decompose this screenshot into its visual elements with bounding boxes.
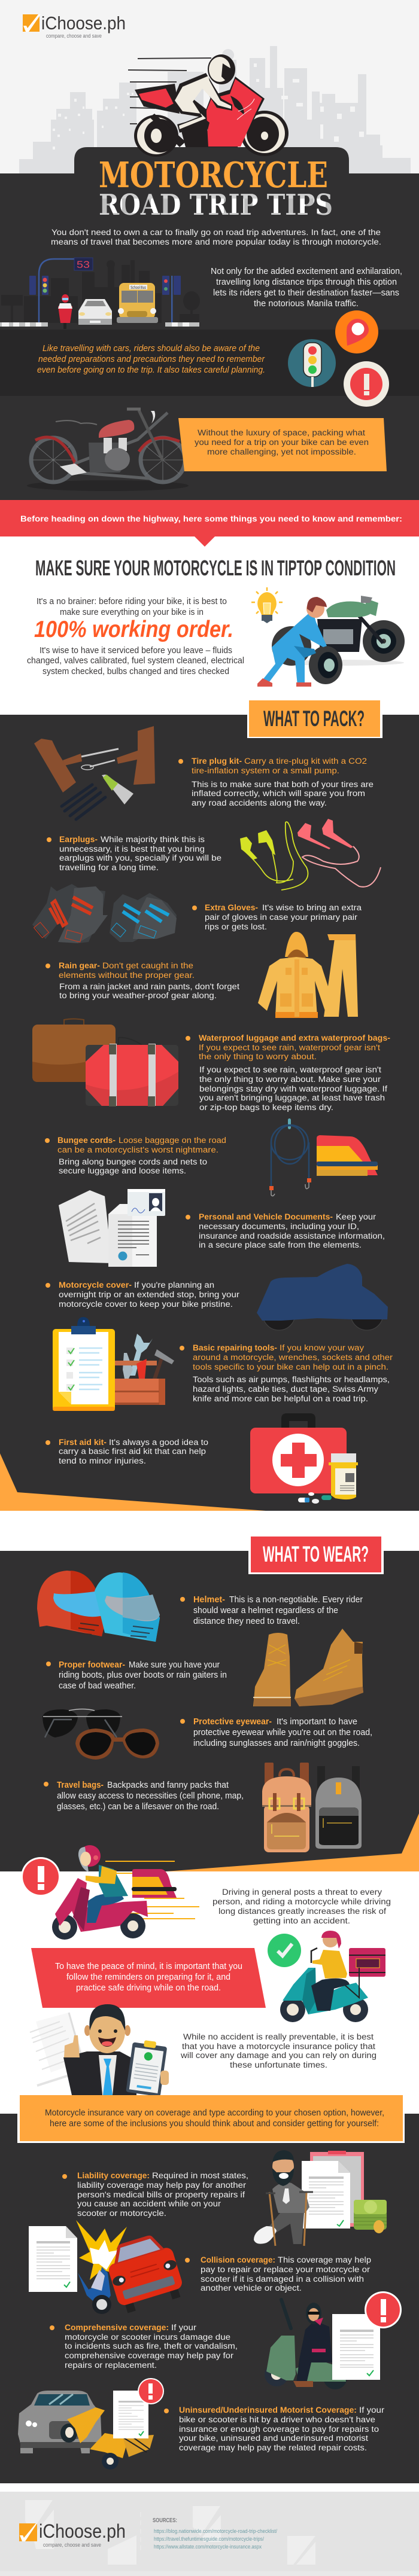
item: motorcycle cover: motorcycle cover to keep your bike pristine. bbox=[59, 1300, 233, 1309]
body text: insurance policy: will cover any damage and you can rely on during bbox=[180, 2051, 377, 2060]
orange note: Without the luxury of space, packing what bbox=[198, 428, 365, 437]
item: uninsured motorist coverage: Uninsured/Underinsured Motorist Coverage: bbox=[179, 2406, 357, 2415]
item: motorcycle cover: Motorcycle cover- bbox=[59, 1281, 132, 1289]
logo: iChoose.ph header: compare, choose and save bbox=[46, 33, 102, 39]
red callout: practice safe driving while on the road. bbox=[76, 1983, 221, 1993]
item: first aid kit: It's always a good idea to bbox=[109, 1438, 208, 1447]
logo: iChoose.ph footer bbox=[19, 2520, 126, 2548]
title: MOTORCYCLE bbox=[99, 154, 328, 196]
icon: alert bbox=[21, 1857, 60, 1897]
item: bungee cords bbox=[45, 1136, 226, 1175]
icon: backpacks bbox=[262, 1763, 362, 1852]
item: helmet: should wear a helmet regardless of the bbox=[193, 1605, 338, 1615]
item: tire plug kit: tire-inflation system or a small pump. bbox=[192, 766, 339, 775]
item: basic repairing tools: Basic repairing tools- bbox=[193, 1343, 277, 1352]
item: motorcycle cover: If you're planning an bbox=[134, 1281, 214, 1289]
logo: iChoose.ph header bbox=[23, 13, 126, 39]
mechanic illustration bbox=[251, 587, 405, 687]
item: waterproof luggage: If you expect to see rain, waterproof gear isn't bbox=[199, 1065, 381, 1074]
item: documents: Personal and Vehicle Documents- bbox=[199, 1212, 333, 1221]
item: liability coverage: scooter or motorcycle. bbox=[77, 2209, 166, 2218]
speed lines bbox=[128, 58, 211, 124]
logo: iChoose.ph footer: compare, choose and save bbox=[43, 2542, 101, 2548]
item: travel bags: Travel bags- bbox=[57, 1780, 104, 1790]
item: rain gear bbox=[45, 961, 239, 1000]
illustration: thief on scooter with document bbox=[265, 2291, 402, 2389]
item: collision coverage: pay to repair or replace your motorcycle or bbox=[201, 2265, 371, 2274]
city skyline bbox=[19, 46, 411, 173]
orange note bbox=[178, 418, 387, 471]
illustration: safe scooter rider bbox=[280, 1931, 385, 2022]
item: liability coverage: person's medical bills or property repairs if bbox=[77, 2190, 245, 2199]
item: collision coverage: another vehicle or object. bbox=[201, 2284, 302, 2293]
item: tire plug kit bbox=[178, 757, 374, 807]
item: extra gloves: pair of gloves in case your primary pair bbox=[205, 913, 358, 922]
orange insurance banner: here are some of the inclusions you should think about and consider getting for yourself: bbox=[50, 2118, 379, 2129]
item: waterproof luggage: Waterproof luggage and extra waterproof bags- bbox=[199, 1034, 390, 1042]
tiptop text block bbox=[27, 596, 244, 676]
orange note: more challenging, yet not impossible. bbox=[207, 447, 356, 456]
item: proper footwear: riding boots, plus over boots or rain gaiters in bbox=[59, 1670, 227, 1680]
title tab bbox=[74, 147, 349, 174]
item: liability coverage: Liability coverage: bbox=[77, 2171, 150, 2180]
icon: boots bbox=[253, 1629, 363, 1706]
sources list: https://blog.nationwide.com/motorcycle-road-trip-checklist/ bbox=[154, 2528, 277, 2535]
item: protective eyewear bbox=[180, 1717, 372, 1748]
orange note: you need for a trip on your bike can be even bbox=[195, 438, 369, 447]
item: collision coverage bbox=[185, 2255, 371, 2293]
item: collision coverage: Collision coverage: bbox=[201, 2255, 275, 2264]
body text: driving threat bbox=[212, 1888, 391, 1925]
tiptop text block: system checked, bulbs changed and tires checked bbox=[42, 666, 229, 676]
intro text: You don't need to own a car to finally go on road trip adventures. In fact, one of the bbox=[51, 228, 381, 237]
item: rain gear: to bring your weather-proof gear along. bbox=[59, 991, 217, 1000]
item: documents: Keep your bbox=[336, 1212, 377, 1221]
body text: driving threat: long distances greatly increases the risk of bbox=[218, 1907, 386, 1916]
item: tire plug kit: Carry a tire-plug kit with a CO2 bbox=[244, 757, 367, 766]
item: earplugs bbox=[47, 835, 221, 872]
logo: iChoose.ph footer: iChoose.ph bbox=[39, 2520, 126, 2542]
item: extra gloves: rips or gets lost. bbox=[205, 922, 267, 931]
icon: rain gear bbox=[258, 932, 358, 1018]
illustration: speeding scooter rider bbox=[52, 1845, 199, 1940]
illustration: car hitting yellow scooter bbox=[18, 2378, 164, 2470]
item: basic repairing tools: tools specific to your bike can help out in a pinch. bbox=[193, 1362, 388, 1371]
item: first aid kit: tend to minor injuries. bbox=[59, 1456, 146, 1465]
title bbox=[99, 154, 333, 222]
label: what to pack bbox=[247, 700, 382, 738]
icon: document with check bbox=[29, 2226, 77, 2292]
body text: driving threat: getting into an accident. bbox=[253, 1916, 350, 1925]
icon: luggage bbox=[32, 1019, 178, 1106]
item: bungee cords: Loose baggage on the road bbox=[119, 1136, 226, 1145]
item: basic repairing tools: If you know your way bbox=[280, 1343, 364, 1352]
intro text bbox=[51, 228, 381, 246]
item: tire plug kit: inflated correctly, which will spare you from bbox=[192, 789, 365, 798]
item: extra gloves bbox=[192, 903, 362, 931]
logo: iChoose.ph header: iChoose.ph bbox=[41, 13, 126, 33]
item: basic repairing tools bbox=[180, 1343, 393, 1403]
item: uninsured motorist coverage: coverage may help pay the related repair costs. bbox=[179, 2443, 367, 2452]
body text: faster travel: the notorious Manila traffic. bbox=[254, 298, 359, 309]
item: collision coverage: scooter if it is damaged in a collision with bbox=[201, 2275, 364, 2284]
item: waterproof luggage: or zip-top bags to keep items dry. bbox=[199, 1103, 333, 1112]
icon: alert bbox=[138, 2378, 164, 2404]
icon: alert bbox=[344, 361, 389, 407]
item: rain gear: From a rain jacket and rain pants, don't forget bbox=[59, 982, 239, 991]
icon: motorcycle cover bbox=[257, 1264, 388, 1330]
item: protective eyewear: Protective eyewear- bbox=[193, 1717, 272, 1727]
orange callout text bbox=[37, 343, 265, 375]
body text: driving threat: Driving in general posts a threat to every bbox=[222, 1888, 382, 1897]
item: uninsured motorist coverage: bike or scooter is hit by a driver who doesn't have bbox=[179, 2415, 375, 2424]
item: proper footwear: Proper footwear- bbox=[59, 1660, 125, 1670]
icon: alert bbox=[365, 2291, 402, 2328]
title: ROAD TRIP TIPS bbox=[99, 188, 333, 222]
item: extra gloves: It's wise to bring an extra bbox=[262, 903, 362, 912]
body text: insurance policy: that you have a motorcycle insurance policy that bbox=[182, 2042, 375, 2051]
body text: insurance policy: While no accident is really preventable, it is best bbox=[183, 2032, 374, 2041]
item: liability coverage: liability coverage may help pay for another bbox=[77, 2181, 247, 2190]
body text: faster travel: Not only for the added excitement and exhilaration, bbox=[211, 266, 402, 276]
icon: sunglasses bbox=[42, 1709, 159, 1764]
item: first aid kit: First aid kit- bbox=[59, 1438, 107, 1447]
item: rain gear: elements without the proper gear. bbox=[59, 971, 195, 980]
body text: insurance policy bbox=[180, 2032, 377, 2069]
item: earplugs: earplugs with you, specially if you will be bbox=[59, 853, 221, 862]
item: comprehensive coverage: repairs or replacement. bbox=[65, 2361, 157, 2370]
icon: first aid kit bbox=[250, 1413, 358, 1504]
illustration: insurance agent bbox=[30, 2004, 169, 2097]
tiptop text block: It's a no brainer: before riding your bike, it is best to bbox=[37, 596, 227, 606]
item: uninsured motorist coverage: If your bbox=[359, 2406, 385, 2415]
sources list: https://travel.thefuntimesguide.com/motorcycle-trips/ bbox=[154, 2536, 264, 2543]
body text: faster travel: travelling long distance trips through this option bbox=[216, 277, 397, 287]
traffic countdown sign bbox=[74, 258, 93, 270]
hero motorcycle and rider bbox=[134, 54, 289, 157]
item: earplugs: Earplugs- bbox=[59, 835, 98, 844]
item: comprehensive coverage: motorcycle or scooter incurs damage due bbox=[65, 2333, 230, 2342]
item: motorcycle cover bbox=[45, 1281, 240, 1309]
red banner: Before heading on down the highway, here some things you need to know and remember: bbox=[20, 514, 402, 523]
item: helmet: Helmet- bbox=[193, 1595, 225, 1605]
item: protective eyewear: It's important to have bbox=[277, 1717, 357, 1727]
item: waterproof luggage: the only thing to worry about. bbox=[199, 1052, 317, 1061]
footer watermark bbox=[25, 2500, 315, 2565]
item: protective eyewear: protective eyewear while you're out on the road, bbox=[193, 1727, 372, 1737]
item: waterproof luggage bbox=[186, 1034, 390, 1112]
item: rain gear: Rain gear- bbox=[59, 961, 100, 970]
item: uninsured motorist coverage bbox=[164, 2406, 385, 2452]
icon: gloves bbox=[32, 884, 177, 943]
traffic scene illustration bbox=[0, 258, 200, 329]
red callout bbox=[31, 1948, 266, 2008]
item: rain gear: Don't get caught in the bbox=[102, 961, 193, 970]
traffic scene illustration: School Bus bbox=[130, 286, 146, 290]
item: liability coverage: you cause an accident while on your bbox=[77, 2199, 221, 2208]
body text: driving threat: person, and riding a motorcycle while driving bbox=[212, 1897, 391, 1906]
item: proper footwear bbox=[46, 1660, 227, 1691]
icon: light bulb bbox=[251, 587, 283, 623]
item: waterproof luggage: belongings stay dry with waterproof luggage. If bbox=[199, 1084, 387, 1093]
item: comprehensive coverage: comprehensive coverage may help pay for bbox=[65, 2351, 234, 2360]
item: earplugs: While majority think this is bbox=[101, 835, 205, 844]
icon: tail bag bbox=[317, 1135, 378, 1176]
intro text: means of travel that becomes more and more popular today is through motorcycle. bbox=[51, 237, 381, 246]
item: documents: necessary documents, including your ID, bbox=[199, 1222, 359, 1231]
icon: traffic light bbox=[288, 339, 336, 387]
item: waterproof luggage: you aren't bringing luggage, at least have trash bbox=[199, 1093, 385, 1102]
item: travel bags: allow easy access to necessities (cell phone, map, bbox=[57, 1791, 244, 1801]
item: comprehensive coverage bbox=[50, 2323, 238, 2370]
item: proper footwear: case of bad weather. bbox=[59, 1681, 136, 1691]
item: liability coverage: Required in most states, bbox=[152, 2171, 248, 2180]
tiptop text block: 100% working order. bbox=[34, 617, 233, 642]
body text: faster travel bbox=[211, 266, 402, 309]
item: travel bags: glasses, etc.) can be a lifesaver on the road. bbox=[57, 1801, 219, 1812]
item: uninsured motorist coverage: your bike, uninsured and underinsured motorist bbox=[179, 2434, 368, 2443]
red banner bbox=[0, 500, 419, 547]
item: basic repairing tools: around a motorcycle, wrenches, sockets and other bbox=[193, 1353, 393, 1362]
item: travel bags bbox=[44, 1780, 244, 1812]
classic motorcycle illustration bbox=[27, 409, 189, 491]
icon: helmets bbox=[37, 1571, 160, 1642]
item: comprehensive coverage: Comprehensive coverage: bbox=[65, 2323, 169, 2332]
orange callout text: Like travelling with cars, riders should also be aware of the bbox=[42, 343, 260, 353]
red callout: To have the peace of mind, it is important that you bbox=[55, 1961, 242, 1971]
item: waterproof luggage: If you expect to see rain, waterproof gear isn't bbox=[199, 1043, 380, 1052]
item: bungee cords: secure luggage and loose items. bbox=[59, 1166, 186, 1175]
orange callout text: even before going on to the trip. It also takes careful planning. bbox=[37, 365, 265, 375]
orange corner accent right bbox=[166, 1813, 419, 1871]
tiptop text block: It's wise to have it serviced before you leave – fluids bbox=[40, 645, 232, 656]
tiptop text block: make sure everything on your bike is in bbox=[60, 607, 204, 617]
icon: bungee cord bbox=[269, 1118, 311, 1196]
item: documents: insurance and roadside assistance information, bbox=[199, 1231, 385, 1240]
item: bungee cords: Bungee cords- bbox=[57, 1136, 116, 1145]
item: helmet: This is a non-negotiable. Every rider bbox=[229, 1595, 363, 1605]
item: bungee cords: Bring along bungee cords and nets to bbox=[59, 1157, 207, 1166]
body text: faster travel: lets its riders get to their destination faster—sans bbox=[213, 288, 399, 298]
sources list: https://www.allstate.com/motorcycle-insurance.aspx bbox=[154, 2544, 262, 2550]
item: helmet bbox=[180, 1595, 363, 1626]
item: extra gloves: Extra Gloves- bbox=[205, 903, 258, 912]
red callout: follow the reminders on preparing for it, and bbox=[66, 1972, 230, 1982]
item: bungee cords: can be a motorcyclist's worst nightmare. bbox=[57, 1145, 218, 1154]
label: what to wear bbox=[248, 1537, 384, 1574]
item: first aid kit: carry a basic first aid kit that can help bbox=[59, 1447, 206, 1456]
orange insurance banner bbox=[17, 2095, 405, 2143]
item: first aid kit bbox=[45, 1438, 208, 1465]
traffic countdown sign: 53 bbox=[77, 259, 90, 270]
item: tire plug kit: Tire plug kit- bbox=[192, 757, 242, 766]
orange corner accent left bbox=[0, 1453, 266, 1511]
sources list bbox=[153, 2517, 277, 2550]
item: travel bags: Backpacks and fanny packs that bbox=[107, 1780, 229, 1790]
illustration: collision bbox=[76, 2220, 186, 2315]
sources list: SOURCES: bbox=[153, 2517, 177, 2524]
item: tire plug kit: This is to make sure that both of your tires are bbox=[192, 780, 374, 789]
icon: earplugs bbox=[240, 819, 381, 890]
item: comprehensive coverage: If your bbox=[171, 2323, 197, 2332]
item: protective eyewear: including sunglasses and rain/night goggles. bbox=[193, 1738, 360, 1748]
tiptop text block: changed, valves calibrated, fuel system cleaned, electrical bbox=[27, 656, 244, 666]
item: waterproof luggage: the only thing to worry about. Make sure your bbox=[199, 1075, 381, 1084]
item: motorcycle cover: overnight trip or an extended stop, bring your bbox=[59, 1290, 240, 1299]
icon: clipboard and toolbox bbox=[53, 1317, 174, 1411]
item: basic repairing tools: knife and more can be helpful on a road trip. bbox=[193, 1394, 368, 1403]
icon: green check bbox=[268, 1934, 301, 1967]
icon: documents bbox=[59, 1189, 165, 1267]
item: comprehensive coverage: to incidents such as fire, theft or vandalism, bbox=[65, 2342, 238, 2351]
icon: map pin bbox=[335, 310, 378, 353]
item: tire plug kit: any road accidents along the way. bbox=[192, 798, 327, 807]
item: uninsured motorist coverage: insurance or enough coverage to pay for repairs to bbox=[179, 2425, 379, 2434]
item: collision coverage: This coverage may help bbox=[278, 2255, 371, 2264]
orange callout text: needed preparations and precautions they need to remember bbox=[38, 354, 265, 364]
item: helmet: distance they need to travel. bbox=[193, 1616, 300, 1626]
item: earplugs: travelling for a long time. bbox=[59, 863, 159, 872]
icon: tire plug kit bbox=[34, 726, 155, 819]
item: liability coverage bbox=[62, 2171, 248, 2218]
body text: insurance policy: these unfortunate times. bbox=[230, 2060, 327, 2069]
item: earplugs: unnecessary, it is best that you bring bbox=[59, 845, 205, 853]
item: basic repairing tools: hazard lights, cable ties, duct tape, Swiss Army bbox=[193, 1385, 378, 1394]
item: proper footwear: Make sure you have your bbox=[129, 1660, 220, 1670]
item: basic repairing tools: Tools such as air pumps, flashlights or headlamps, bbox=[193, 1375, 390, 1384]
item: documents bbox=[186, 1212, 385, 1249]
orange insurance banner: Motorcycle insurance vary on coverage and type according to your chosen option, however, bbox=[45, 2108, 384, 2118]
illustration: injured man with documents bbox=[254, 2150, 387, 2246]
item: documents: in a secure place safe from the elements. bbox=[199, 1240, 362, 1249]
